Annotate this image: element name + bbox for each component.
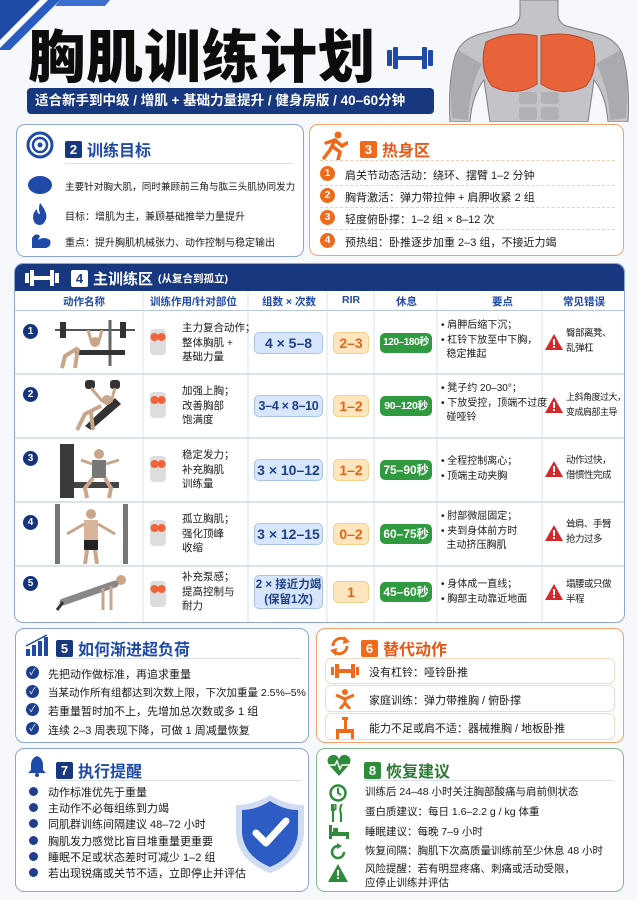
decorative corner stripes <box>0 0 110 50</box>
row 1: bench press: 120–180秒 <box>383 337 429 348</box>
row 3: machine press: 3 × 10–12 <box>257 462 320 478</box>
goal item 2: 目标：增肌为主，兼顾基础推举力量提升 <box>65 212 245 223</box>
reminder list: 若出现锐痛或关节不适，立即停止并评估 <box>48 868 246 880</box>
row 3: machine press <box>23 444 612 498</box>
row 1: bench press: 臀部离凳、 <box>566 328 611 339</box>
row 2: incline dumbbell: • 凳子约 20–30°； <box>441 383 522 394</box>
heading: 热身区 <box>382 143 430 160</box>
alt item 2: 家庭训练：弹力带推胸 / 俯卧撑 <box>369 695 521 707</box>
row 3: machine press: 补充胸肌 <box>182 464 224 476</box>
warm-up item 4 <box>320 233 556 249</box>
row 4: cable fly: • 肘部微屈固定； <box>441 511 517 522</box>
subtitle bar: 适合新手到中级 / 增肌 + 基础力量提升 / 健身房版 / 40–60分钟 <box>35 93 405 108</box>
warm-up item 4: 4 <box>325 235 330 246</box>
column headers: 动作名称 <box>63 296 105 308</box>
heading: 训练目标 <box>87 143 151 160</box>
row 2: incline dumbbell: 饱满度 <box>182 414 214 426</box>
warm-up item 2: 2 <box>325 190 330 201</box>
row 1: bench press: 基础力量 <box>182 351 224 363</box>
reminder list: 睡眠不足或状态差时可减少 1–2 组 <box>48 852 215 864</box>
warm-up item 1 <box>320 166 534 182</box>
row 5: push-up <box>23 571 612 612</box>
reminder list: 动作标准优先于重量 <box>48 787 147 799</box>
row 3: machine press: 3 <box>28 453 33 464</box>
heading: 恢复建议 <box>386 764 450 781</box>
recovery items: 风险提醒：若有明显疼痛、刺痛或活动受限， <box>365 863 575 875</box>
row 5: push-up: • 胸部主动靠近地面 <box>441 594 527 604</box>
row 2: incline dumbbell: 2 <box>28 389 33 400</box>
heading: 8 <box>369 762 376 778</box>
icon: mini chest <box>150 581 166 607</box>
heading <box>361 636 447 660</box>
row 5: push-up: 补充泵感； <box>182 571 234 583</box>
warm-up item 3: 3 <box>325 212 330 223</box>
icon: mini chest <box>150 456 166 482</box>
row 5: push-up: 5 <box>28 578 33 589</box>
icon: runner <box>322 132 348 160</box>
overload item 3 <box>26 702 306 717</box>
row 2: incline dumbbell: 上斜角度过大， <box>566 392 625 402</box>
panel: main training table <box>14 263 625 623</box>
heading <box>65 141 151 160</box>
row 4: cable fly: 3 × 12–15 <box>257 526 320 542</box>
overload item 2: 当某动作所有组都达到次数上限，下次加重量 2.5%–5% <box>48 687 306 699</box>
heading: 3 <box>365 142 372 156</box>
title: 胸肌训练计划 <box>28 12 376 94</box>
table header bar: 主训练区 <box>93 271 153 288</box>
overload item 1 <box>26 666 191 681</box>
recovery items: 恢复间隔：胸肌下次高质量训练前至少休息 48 小时 <box>365 845 603 857</box>
row 1: bench press: 1 <box>28 326 33 337</box>
row 1: bench press: 2–3 <box>339 335 363 351</box>
row 1: bench press: 稳定推起 <box>447 349 487 360</box>
overload item 1: 先把动作做标准，再追求重量 <box>48 669 191 681</box>
row 5: push-up: 塌腰或只做 <box>566 579 611 590</box>
column headers <box>15 291 626 311</box>
row 4: cable fly: 孤立胸肌； <box>182 513 234 525</box>
reminder list: 同肌群训练间隔建议 48–72 小时 <box>48 819 206 831</box>
warm-up item 1: 1 <box>325 168 330 179</box>
table header bar: 4 <box>76 271 83 286</box>
row 1: bench press: 乱弹杠 <box>566 342 593 354</box>
row 4: cable fly <box>23 504 612 564</box>
column headers: 组数 × 次数 <box>262 296 316 308</box>
panel: progressive overload <box>15 628 309 743</box>
illustration: push-up <box>56 575 126 611</box>
illustration: cable crossover <box>55 504 128 564</box>
illustration: chest muscle torso <box>449 0 629 122</box>
row 3: machine press: 借惯性完成 <box>566 470 611 480</box>
column headers: 要点 <box>492 296 513 308</box>
illustration: incline dumbbell press <box>75 380 121 431</box>
icon: dumbbell title <box>387 47 433 69</box>
row 5: push-up: 2 × 接近力竭 <box>256 579 321 591</box>
row 3: machine press: • 顶端主动夹胸 <box>441 470 507 482</box>
heading: 6 <box>366 640 373 656</box>
goal item 3 <box>32 234 275 249</box>
row 2: incline dumbbell: 加强上胸； <box>182 385 234 397</box>
row 1: bench press: 4 × 5–8 <box>265 335 312 351</box>
overload item 3: 若重量暂时加不上，先增加总次数或多 1 组 <box>48 706 258 718</box>
row 1: bench press: • 肩胛后缩下沉； <box>441 320 517 331</box>
icon: bell <box>28 755 46 777</box>
row 5: push-up: (保留1次) <box>264 594 313 606</box>
row 3: machine press: 训练量 <box>182 478 214 490</box>
table header bar <box>15 264 626 291</box>
row 3: machine press: 稳定发力； <box>182 449 234 461</box>
reminder list <box>26 784 236 888</box>
icon: warning <box>545 334 563 350</box>
icon: warning <box>545 584 563 600</box>
recovery items: 蛋白质建议：每日 1.6–2.2 g / kg 体重 <box>365 806 539 818</box>
icon: mini chest <box>150 392 166 418</box>
warm-up item 2: 胸背激活：弹力带拉伸 + 肩胛收紧 2 组 <box>345 192 535 204</box>
row 5: push-up: 耐力 <box>182 600 203 612</box>
heading <box>360 141 430 160</box>
row 5: push-up: 45–60秒 <box>383 585 429 599</box>
icon: shield check <box>234 793 306 875</box>
row 4: cable fly: • 夹到身体前方时 <box>441 526 517 536</box>
row 3: machine press: 动作过快， <box>566 455 611 466</box>
reminder list: 胸肌发力感觉比盲目堆重量更重要 <box>48 836 213 848</box>
icon: heart <box>327 754 351 776</box>
heading: 2 <box>70 142 77 156</box>
row 4: cable fly: 60–75秒 <box>383 527 429 541</box>
row 2: incline dumbbell: 改善胸部 <box>182 400 224 412</box>
heading: 5 <box>61 640 68 656</box>
warm-up item 3: 轻度俯卧撑：1–2 组 × 8–12 次 <box>345 214 494 226</box>
row 4: cable fly: 主动挤压胸肌 <box>447 540 507 551</box>
recovery items: 睡眠建议：每晚 7–9 小时 <box>365 826 483 838</box>
icon: target <box>26 132 54 158</box>
icon: bar chart <box>26 634 48 656</box>
panel: recovery <box>316 748 624 892</box>
row 5: push-up: • 身体成一直线； <box>441 579 517 590</box>
row 4: cable fly: 强化顶峰 <box>182 528 224 540</box>
column headers: 休息 <box>396 296 417 308</box>
row 3: machine press: 1–2 <box>339 462 363 478</box>
warm-up item 2 <box>320 188 535 204</box>
icon: mini chest <box>150 329 166 355</box>
row 3: machine press: 75–90秒 <box>383 463 429 477</box>
row 5: push-up: 半程 <box>566 594 584 604</box>
heading: 替代动作 <box>383 642 447 659</box>
illustration: barbell bench <box>55 320 135 368</box>
icon: mini chest <box>150 520 166 546</box>
icon: warning <box>545 397 563 413</box>
warm-up item 3 <box>320 210 494 226</box>
icon: warning <box>545 525 563 541</box>
column headers: 常见错误 <box>563 296 605 308</box>
overload item 1: ✓ <box>29 667 36 677</box>
column headers: 训练作用/针对部位 <box>150 296 237 308</box>
table header bar: (从复合到孤立) <box>158 273 228 285</box>
column headers: RIR <box>342 294 360 306</box>
heading: 如何渐进超负荷 <box>78 642 190 659</box>
row 2: incline dumbbell <box>23 380 625 431</box>
goal item 2 <box>33 203 245 225</box>
row 4: cable fly: 0–2 <box>339 526 363 542</box>
row 5: push-up: 提高控制与 <box>182 586 234 598</box>
row 1: bench press <box>23 319 611 368</box>
icon: dumbbell white <box>25 270 59 286</box>
row 4: cable fly: 收缩 <box>182 542 203 554</box>
row 4: cable fly: 耸肩、手臂 <box>566 519 611 530</box>
row 2: incline dumbbell: 碰哑铃 <box>447 412 477 423</box>
alt item 3 <box>325 713 615 740</box>
row 5: push-up: 1 <box>347 584 355 600</box>
icon: warning <box>545 461 563 477</box>
heading: 执行提醒 <box>78 764 142 781</box>
alt item 1 <box>325 658 615 684</box>
heading <box>364 758 450 782</box>
goal item 3: 重点：提升胸肌机械张力、动作控制与稳定输出 <box>65 238 275 249</box>
heading <box>56 758 142 782</box>
panel: execution reminders <box>15 748 309 892</box>
reminder list: 主动作不必每组练到力竭 <box>48 803 169 815</box>
panel: alternatives <box>316 628 624 743</box>
row 2: incline dumbbell: 变成肩部主导 <box>566 406 617 416</box>
goal item 1: 主要针对胸大肌，同时兼顾前三角与肱三头肌协同发力 <box>65 182 295 193</box>
recovery items <box>327 782 622 890</box>
panel: warm-up <box>309 124 624 256</box>
warm-up item 1: 肩关节动态活动：绕环、摆臂 1–2 分钟 <box>345 170 534 182</box>
illustration: chest machine <box>60 444 120 498</box>
overload item 3: ✓ <box>29 704 36 714</box>
row 1: bench press: 整体胸肌 + <box>182 336 233 348</box>
overload item 4: 连续 2–3 周表现下降，可做 1 周减量恢复 <box>48 725 250 737</box>
row 1: bench press: • 杠铃下放至中下胸， <box>441 334 537 346</box>
column dividers <box>15 291 624 622</box>
row 2: incline dumbbell: 90–120秒 <box>384 400 428 412</box>
goal item 1 <box>28 176 295 194</box>
subtitle bar <box>27 88 434 114</box>
row 2: incline dumbbell: • 下放受控，顶端不过度 <box>441 398 547 408</box>
row 2: incline dumbbell: 3–4 × 8–10 <box>259 399 318 413</box>
row 1: bench press: 主力复合动作； <box>182 322 256 334</box>
recovery items: 应停止训练并评估 <box>365 877 449 889</box>
row 3: machine press: • 全程控制离心； <box>441 456 517 467</box>
row 4: cable fly: 抢力过多 <box>566 534 602 544</box>
recovery items: 训练后 24–48 小时关注胸部酸痛与肩前侧状态 <box>365 786 579 798</box>
heading: 7 <box>61 762 68 778</box>
overload item 4: ✓ <box>29 723 36 733</box>
overload item 2: ✓ <box>29 686 36 696</box>
warm-up item 4: 预热组：卧推逐步加重 2–3 组，不接近力竭 <box>345 237 556 249</box>
overload item 4 <box>26 721 306 736</box>
alt item 3: 能力不足或肩不适：器械推胸 / 地板卧推 <box>369 723 565 735</box>
row 4: cable fly: 4 <box>28 517 33 528</box>
icon: swap arrows <box>329 634 351 658</box>
alt item 1: 没有杠铃：哑铃卧推 <box>369 667 468 679</box>
alt item 2 <box>325 685 615 712</box>
row 2: incline dumbbell: 1–2 <box>339 398 363 414</box>
panel: training goals <box>16 124 304 257</box>
